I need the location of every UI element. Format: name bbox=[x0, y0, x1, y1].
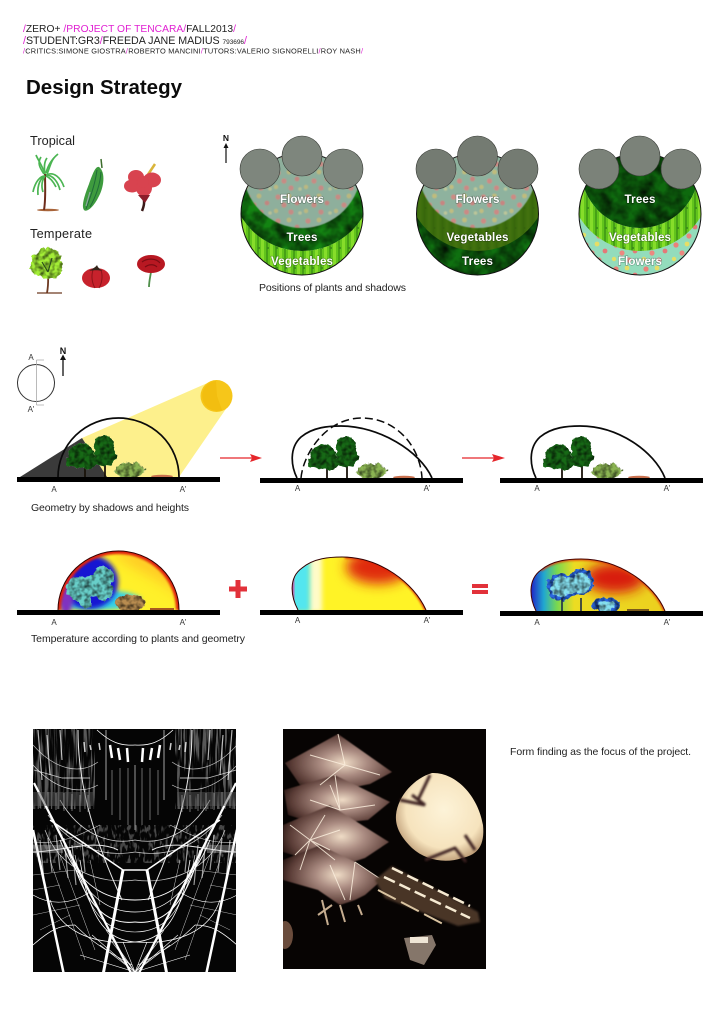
band labels: Vegetables bbox=[271, 255, 333, 268]
section labels bbox=[295, 616, 431, 625]
panel: plant layout diagram 2 bbox=[416, 136, 539, 276]
inflated diamonds bbox=[283, 734, 392, 905]
ground bbox=[260, 610, 463, 615]
dashed arch bbox=[301, 418, 422, 478]
planting bands: flowers, vegetables, trees bbox=[580, 157, 700, 274]
band labels: Flowers bbox=[280, 193, 324, 206]
header: project credits bbox=[23, 24, 364, 56]
ground bbox=[260, 478, 463, 483]
band labels: Vegetables bbox=[446, 231, 508, 244]
ground bbox=[500, 478, 703, 483]
title: Design Strategy bbox=[26, 76, 183, 99]
header: project credits: /CRITICS:SIMONE GIOSTRA/ROBERTO MANCINI/TUTORS:VALERIO SIGNORELLI/ROY NASH/ bbox=[23, 46, 364, 56]
caption: temperature: Temperature according to plants and geometry bbox=[31, 633, 246, 645]
arch bbox=[531, 426, 665, 478]
icon: cucumber bbox=[83, 159, 103, 211]
cast shadow bbox=[20, 438, 107, 477]
section labels bbox=[51, 485, 187, 494]
panel: deformed geometry section bbox=[260, 418, 463, 493]
solid arch bbox=[292, 426, 432, 478]
note: form finding: Form finding as the focus of the project. bbox=[510, 746, 691, 758]
section labels: A bbox=[51, 618, 57, 627]
icon: rose bbox=[137, 255, 165, 287]
panel: final geometry section bbox=[500, 426, 703, 493]
section labels bbox=[51, 618, 187, 627]
band labels bbox=[609, 193, 671, 268]
icon: north arrow, plan bbox=[223, 133, 229, 163]
heat colours bbox=[292, 558, 426, 610]
band labels: Flowers bbox=[618, 255, 662, 268]
band labels: Trees bbox=[286, 231, 318, 244]
arch bbox=[58, 418, 179, 477]
icon: north arrow, section: N bbox=[60, 346, 66, 356]
panel: sun and shadow section bbox=[17, 380, 232, 494]
arrow: step two bbox=[462, 454, 505, 462]
section labels: A bbox=[295, 484, 301, 493]
icon: broadleaf tree bbox=[30, 248, 62, 293]
section labels: A bbox=[534, 618, 540, 627]
shadow circles bbox=[416, 136, 538, 189]
dome outline bbox=[292, 557, 426, 610]
shadow circles bbox=[240, 136, 363, 189]
section labels: A bbox=[534, 484, 540, 493]
sun bbox=[200, 380, 232, 412]
photo: suspended cable structure bbox=[33, 729, 237, 975]
icon: palm tree bbox=[33, 154, 64, 211]
band labels: Trees bbox=[624, 193, 656, 206]
heading: temperate: Temperate bbox=[30, 227, 92, 241]
icon: hibiscus flower bbox=[124, 164, 161, 211]
section labels bbox=[534, 484, 671, 493]
sun beam bbox=[82, 381, 230, 477]
heat colours bbox=[531, 560, 664, 611]
heat colours bbox=[58, 552, 178, 610]
icon: section key plan: A bbox=[28, 353, 34, 362]
panel: climate plant legend bbox=[30, 134, 165, 293]
photo: inflated plastic forms bbox=[277, 729, 486, 969]
heading: tropical: Tropical bbox=[30, 134, 75, 148]
inflated round form bbox=[396, 773, 483, 862]
long tube form bbox=[375, 866, 480, 926]
section labels: A bbox=[51, 485, 57, 494]
band labels bbox=[446, 193, 508, 268]
header: project credits: /ZERO+ /PROJECT OF TENCARA/FALL2013/ bbox=[23, 24, 236, 35]
icon: tomato bbox=[82, 265, 110, 288]
header: project credits: /STUDENT:GR3/FREEDA JANE MADIUS 793696/ bbox=[23, 35, 247, 47]
dome outline bbox=[531, 559, 665, 611]
section labels bbox=[534, 618, 671, 627]
section labels: A' bbox=[180, 618, 187, 627]
panel: combined temperature heatmap bbox=[500, 557, 703, 627]
panel: geometry temperature heatmap bbox=[260, 556, 463, 623]
panel: plant temperature heatmap bbox=[17, 548, 220, 627]
crease lines bbox=[290, 734, 382, 900]
band labels bbox=[271, 193, 333, 268]
band labels: Vegetables bbox=[609, 231, 671, 244]
ground bbox=[17, 477, 220, 482]
band labels: Trees bbox=[462, 255, 493, 268]
section labels: A' bbox=[424, 616, 431, 625]
lower debris bbox=[277, 900, 436, 965]
planting bands: vegetables, trees, flowers bbox=[242, 157, 362, 274]
plants bbox=[66, 435, 173, 478]
icon: section key plan: A' bbox=[28, 405, 35, 414]
section labels: A bbox=[295, 616, 301, 625]
icon: north arrow, section bbox=[60, 346, 66, 376]
section labels: A' bbox=[664, 618, 671, 627]
arrow: step one bbox=[220, 454, 262, 462]
caption: geometry: Geometry by shadows and heights bbox=[31, 502, 189, 514]
caption: positions: Positions of plants and shadows bbox=[259, 282, 406, 294]
ground bbox=[500, 611, 703, 616]
icon: section key plan bbox=[18, 353, 54, 414]
section labels: A' bbox=[180, 485, 187, 494]
ground bbox=[17, 610, 220, 615]
icon: north arrow, plan: N bbox=[223, 133, 229, 143]
section labels: A' bbox=[424, 484, 431, 493]
equals sign bbox=[472, 586, 488, 592]
section labels: A' bbox=[664, 484, 671, 493]
plants bbox=[543, 436, 650, 479]
plus sign bbox=[229, 580, 247, 598]
plants bbox=[308, 436, 415, 479]
panel: plant layout diagram 3 bbox=[578, 136, 702, 276]
planting bands: trees, vegetables, flowers bbox=[417, 157, 538, 274]
dome outline bbox=[58, 551, 179, 610]
shadow circles bbox=[579, 136, 701, 189]
band labels: Flowers bbox=[456, 193, 500, 206]
section labels bbox=[295, 484, 431, 493]
panel: plant layout diagram 1 bbox=[240, 136, 364, 276]
